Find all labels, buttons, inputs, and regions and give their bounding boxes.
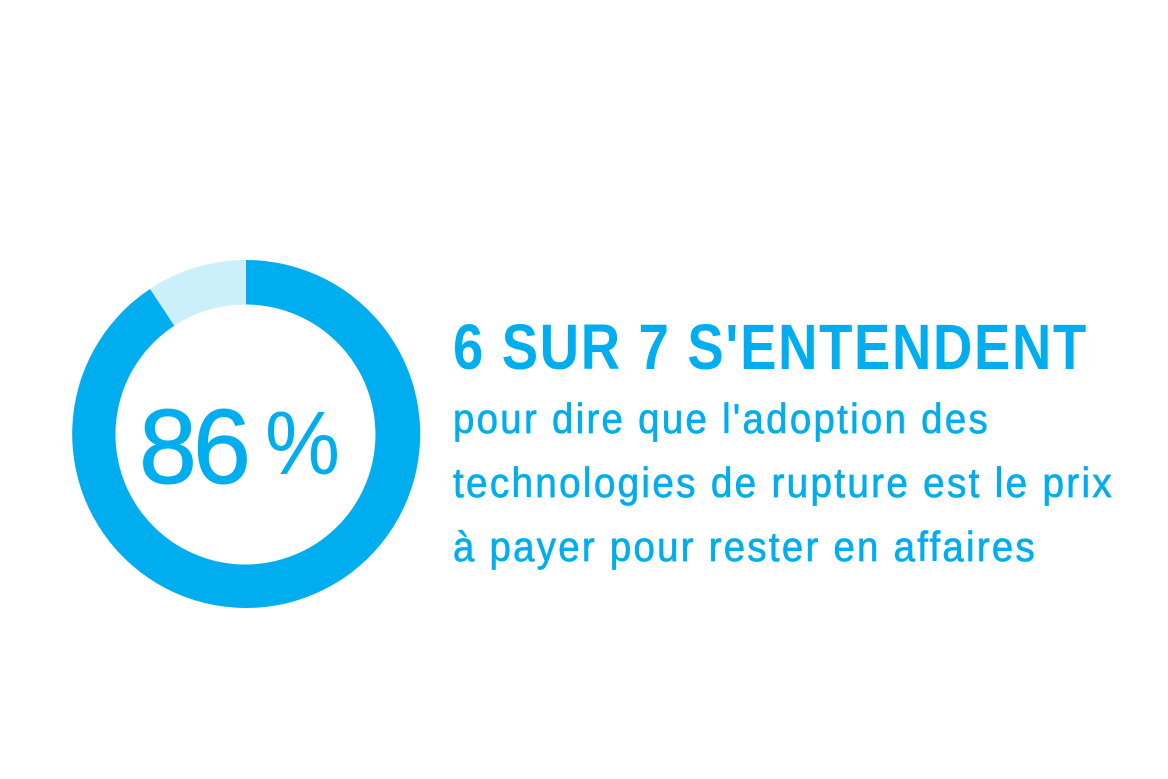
body text [453, 395, 1114, 570]
donut remainder segment [150, 260, 246, 326]
donut chart [72, 260, 420, 608]
body line 1: pour dire que l'adoption des [453, 395, 990, 442]
donut value segment [72, 260, 420, 608]
body line 2: technologies de rupture est le prix [453, 459, 1114, 506]
percentage number: 86 [139, 388, 247, 506]
body line 3: à payer pour rester en affaires [453, 523, 1037, 570]
percent sign: % [265, 394, 340, 494]
